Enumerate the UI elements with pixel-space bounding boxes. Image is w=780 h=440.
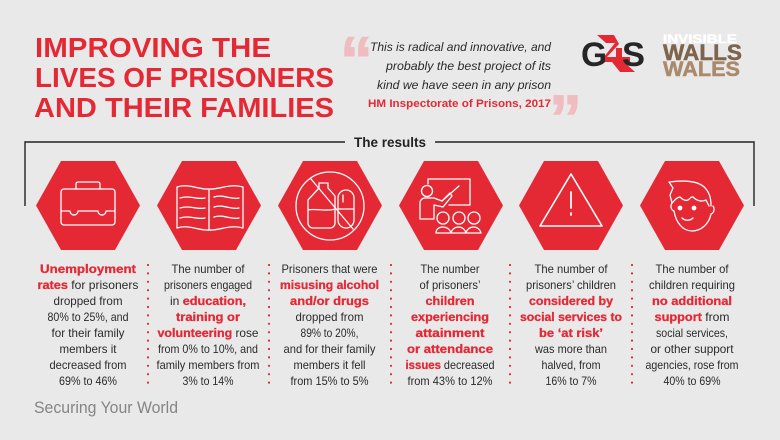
text: no additional support: 40% to 69% (664, 375, 720, 388)
text: unemployment: decreased from (50, 359, 126, 372)
text: at risk: 16% to 7% (546, 375, 596, 388)
logo: G4S (581, 35, 645, 74)
logo: Invisible Walls Wales: WALES (663, 58, 740, 81)
logo: G4S: S (622, 36, 645, 74)
text: at risk: halved, from (542, 359, 600, 372)
quote: ” (549, 81, 582, 155)
text: unemployment: rates for prisoners (38, 278, 139, 292)
text: alcohol and drugs: 89% to 20%, (300, 327, 358, 340)
text: alcohol and drugs: dropped from (296, 311, 364, 324)
text: unemployment: 80% to 25%, and (48, 311, 128, 324)
hexagon: warning icon (519, 161, 623, 250)
quote (340, 23, 582, 155)
tagline: Securing Your World (34, 399, 178, 417)
text: attainment: from 43% to 12% (408, 375, 492, 388)
text: at risk: be ‘at risk’ (539, 326, 603, 340)
text: unemployment: Unemployment (40, 262, 136, 276)
text: education: family members from (156, 359, 260, 372)
text: attainment: experiencing (411, 310, 489, 324)
text: at risk: considered by (529, 294, 613, 308)
text: no additional support: no additional (652, 294, 732, 308)
text: attainment: The number (420, 263, 480, 276)
text: unemployment: dropped from (54, 295, 122, 308)
text: at risk: was more than (534, 343, 607, 356)
text: unemployment (38, 262, 139, 388)
title (34, 32, 334, 123)
hexagon: briefcase icon (36, 161, 140, 250)
logo: Invisible Walls Wales: WALLS (663, 40, 742, 65)
text: attainment: children (426, 294, 474, 308)
quote: “ (340, 23, 373, 97)
text: education: volunteering rose (158, 326, 258, 340)
text: education: training or (176, 310, 240, 324)
text: education: from 0% to 10%, and (158, 343, 258, 356)
text: no additional support: social services, (656, 327, 728, 340)
text: no additional support (646, 263, 738, 388)
text: attainment (406, 263, 494, 388)
text: unemployment: for their family (52, 327, 125, 340)
text: alcohol and drugs: and/or drugs (290, 294, 369, 308)
text: at risk: The number of (534, 263, 608, 276)
text: no additional support: agencies, rose from (646, 359, 738, 372)
logo: Invisible Walls Wales: INVISIBLE (663, 32, 737, 46)
text: alcohol and drugs (280, 263, 379, 388)
hexagon: classroom icon (399, 161, 503, 250)
text: no additional support: support from (654, 310, 730, 324)
text: education (156, 263, 260, 388)
text: alcohol and drugs: members it fell (294, 359, 366, 372)
text: education: 3% to 14% (182, 375, 234, 388)
results heading bracket: The results (354, 135, 426, 150)
text: alcohol and drugs: misusing alcohol (280, 278, 379, 292)
text: no additional support: or other support (650, 343, 734, 356)
text: at risk: prisoners’ children (526, 279, 616, 292)
logo: G4S: G (581, 36, 607, 74)
title: AND THEIR FAMILIES (34, 92, 334, 123)
text: at risk (520, 263, 622, 388)
text: no additional support: children requiring (649, 279, 735, 292)
text: education: prisoners engaged (164, 279, 252, 292)
text: alcohol and drugs: from 15% to 5% (290, 375, 368, 388)
text: no additional support: The number of (656, 263, 729, 276)
text: attainment: attainment (416, 326, 484, 340)
text: education: The number of (172, 263, 245, 276)
text: alcohol and drugs: and for their family (284, 343, 376, 356)
text: unemployment: 69% to 46% (59, 375, 117, 388)
text: unemployment: members it (60, 343, 117, 356)
results heading bracket (25, 135, 754, 206)
hexagon: book icon (157, 161, 261, 250)
title: IMPROVING THE (35, 32, 271, 63)
text: alcohol and drugs: Prisoners that were (282, 263, 378, 276)
text: education: in education, (170, 294, 246, 308)
title: LIVES OF PRISONERS (35, 62, 334, 93)
quote: kind we have seen in any prison (377, 78, 551, 92)
text: attainment: or attendance (407, 342, 493, 356)
text: attainment: of prisoners’ (420, 279, 480, 292)
quote: HM Inspectorate of Prisons, 2017 (368, 98, 551, 110)
text: at risk: social services to (520, 310, 622, 324)
text: attainment: issues decreased (406, 358, 494, 372)
quote: This is radical and innovative, and (370, 40, 551, 54)
logo: Invisible Walls Wales (663, 32, 742, 81)
quote: probably the best project of its (385, 59, 551, 73)
hexagon: no alcohol or drugs icon (278, 161, 382, 250)
hexagon: child face icon (640, 161, 744, 250)
